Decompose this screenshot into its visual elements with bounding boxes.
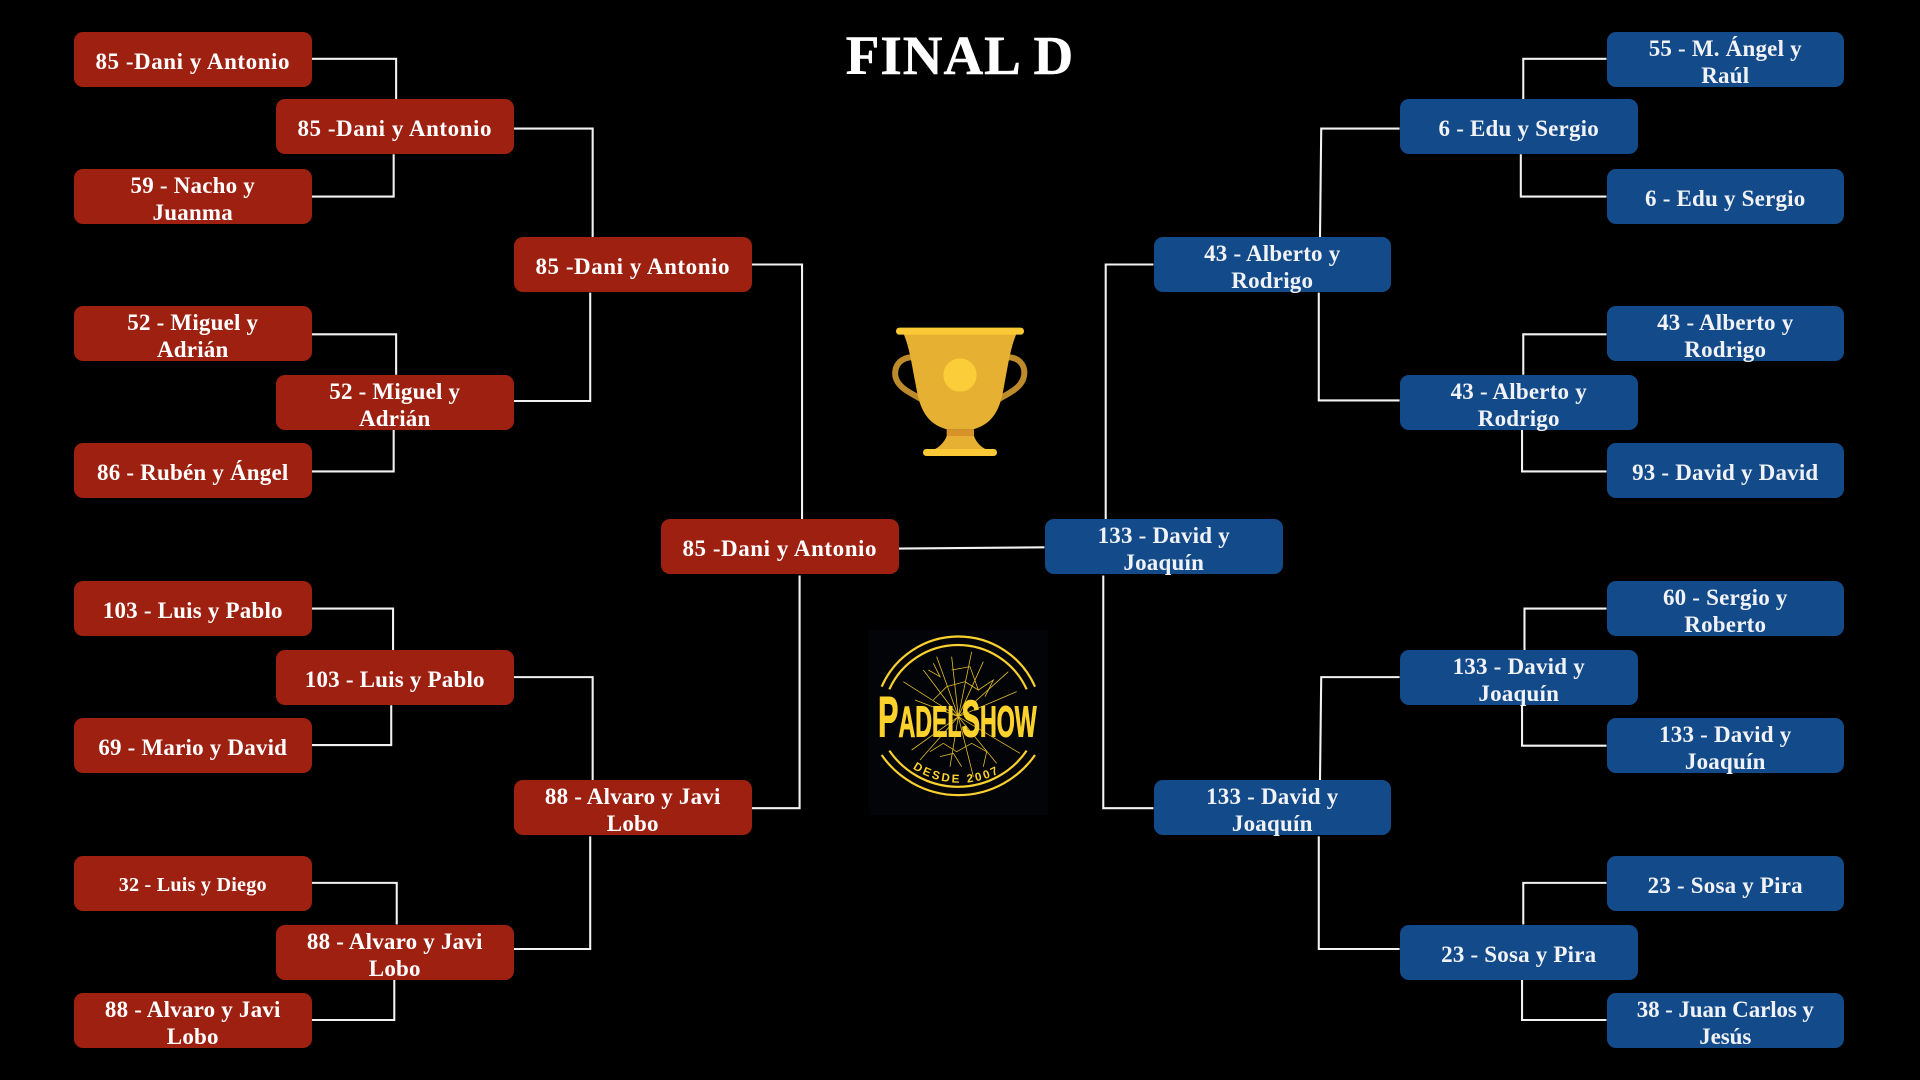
finalist box: left <box>661 519 898 574</box>
connectors: right round 1 <box>1521 59 1607 1020</box>
team box: 43 - Alberto y <box>1657 310 1793 334</box>
team box: 86 - Rubén y Ángel <box>97 460 288 485</box>
team box: Roberto <box>1684 612 1766 637</box>
team box: 32 - Luis y Diego <box>119 874 267 896</box>
shattered glass cracks <box>903 652 1020 777</box>
panel: left bracket round 1 <box>74 32 312 1049</box>
team box <box>1400 375 1638 430</box>
logo: PadelShow: DESDE 2007 <box>913 762 996 783</box>
team box: 88 - Alvaro y Javi <box>545 784 721 808</box>
team box <box>276 925 514 980</box>
team box: 133 - David y <box>1659 722 1791 746</box>
team box <box>1606 32 1844 87</box>
team box: 52 - Miguel y <box>127 310 258 334</box>
team box: Raúl <box>1701 63 1749 88</box>
title: FINAL D <box>846 25 1074 86</box>
team box: Jesús <box>1699 1024 1751 1049</box>
panel: right bracket round 2 <box>1400 99 1638 980</box>
connector: final <box>899 547 1044 549</box>
team box: Adrián <box>157 337 228 362</box>
team box: 88 - Alvaro y Javi <box>307 928 483 954</box>
team box: Joaquín <box>1685 749 1766 774</box>
team box: Joaquín <box>1232 811 1313 836</box>
team box: 23 - Sosa y Pira <box>1648 873 1803 898</box>
team box <box>74 32 312 87</box>
team box <box>74 993 312 1048</box>
panel: left semifinals <box>514 237 752 836</box>
finalist box: right: Joaquín <box>1123 550 1204 575</box>
team box: Juanma <box>153 200 233 225</box>
team box: 43 - Alberto y <box>1204 240 1340 266</box>
team box: Joaquín <box>1478 681 1559 706</box>
team box <box>276 650 514 705</box>
team box <box>74 856 312 911</box>
connectors: right round 2 <box>1319 129 1400 949</box>
team box <box>1606 169 1844 224</box>
team box: 93 - David y David <box>1632 460 1818 485</box>
team box: 60 - Sergio y <box>1663 584 1788 610</box>
team box: 133 - David y <box>1453 654 1585 678</box>
team box: 88 - Alvaro y Javi <box>105 996 281 1022</box>
team box: Lobo <box>607 811 659 836</box>
panel: left bracket round 2 <box>276 99 514 981</box>
team box: 6 - Edu y Sergio <box>1439 116 1599 141</box>
team box: 103 - Luis y Pablo <box>103 598 283 623</box>
team box: 38 - Juan Carlos y <box>1637 996 1814 1022</box>
logo rings <box>882 637 1035 795</box>
connectors: left semifinal <box>751 264 802 808</box>
finalist box: right <box>1045 519 1282 574</box>
team box: 85 -Dani y Antonio <box>535 254 730 279</box>
team box: 103 - Luis y Pablo <box>305 667 485 692</box>
team box <box>1606 718 1844 773</box>
team box: 85 -Dani y Antonio <box>95 49 290 74</box>
team box <box>1606 306 1844 361</box>
team box <box>276 99 514 154</box>
team box: Adrián <box>359 406 430 431</box>
team box: 59 - Nacho y <box>131 172 255 198</box>
connectors: right semifinal <box>1103 264 1153 808</box>
team box <box>74 443 312 498</box>
finalist box: left: 85 -Dani y Antonio <box>682 536 877 561</box>
team box: 69 - Mario y David <box>98 735 287 760</box>
panel: right bracket round 1 <box>1607 32 1844 1049</box>
team box <box>514 780 752 835</box>
finalist box: right: 133 - David y <box>1098 522 1230 548</box>
panel: right semifinals <box>1154 237 1391 836</box>
team box: 23 - Sosa y Pira <box>1441 942 1596 967</box>
team box <box>1606 856 1844 911</box>
team box: 6 - Edu y Sergio <box>1645 186 1805 211</box>
logo tagline <box>913 768 1007 783</box>
team box <box>1400 99 1638 154</box>
team box <box>1606 993 1844 1048</box>
team box: 55 - M. Ángel y <box>1649 36 1802 60</box>
team box <box>1400 925 1638 980</box>
team box <box>1154 237 1391 292</box>
logo: PadelShow <box>878 635 1037 796</box>
team box: 133 - David y <box>1206 784 1338 808</box>
icon: gold trophy <box>892 328 1028 456</box>
team box: Lobo <box>167 1024 219 1049</box>
team box: 52 - Miguel y <box>329 378 460 404</box>
team box <box>74 718 312 773</box>
team box <box>74 169 312 224</box>
team box <box>74 581 312 636</box>
team box <box>1400 650 1638 705</box>
connectors: left round 1 <box>311 59 397 1020</box>
team box: Rodrigo <box>1231 268 1313 293</box>
team box <box>1154 780 1391 835</box>
team box: Rodrigo <box>1478 406 1560 431</box>
team box: 85 -Dani y Antonio <box>297 116 492 141</box>
team box: 43 - Alberto y <box>1451 378 1587 404</box>
team box <box>74 306 312 361</box>
team box: Rodrigo <box>1684 337 1766 362</box>
team box <box>276 375 514 430</box>
team box: Lobo <box>369 956 421 981</box>
team box <box>1606 581 1844 636</box>
team box <box>1606 443 1844 498</box>
connectors: left round 2 <box>513 129 593 949</box>
team box <box>514 237 752 292</box>
